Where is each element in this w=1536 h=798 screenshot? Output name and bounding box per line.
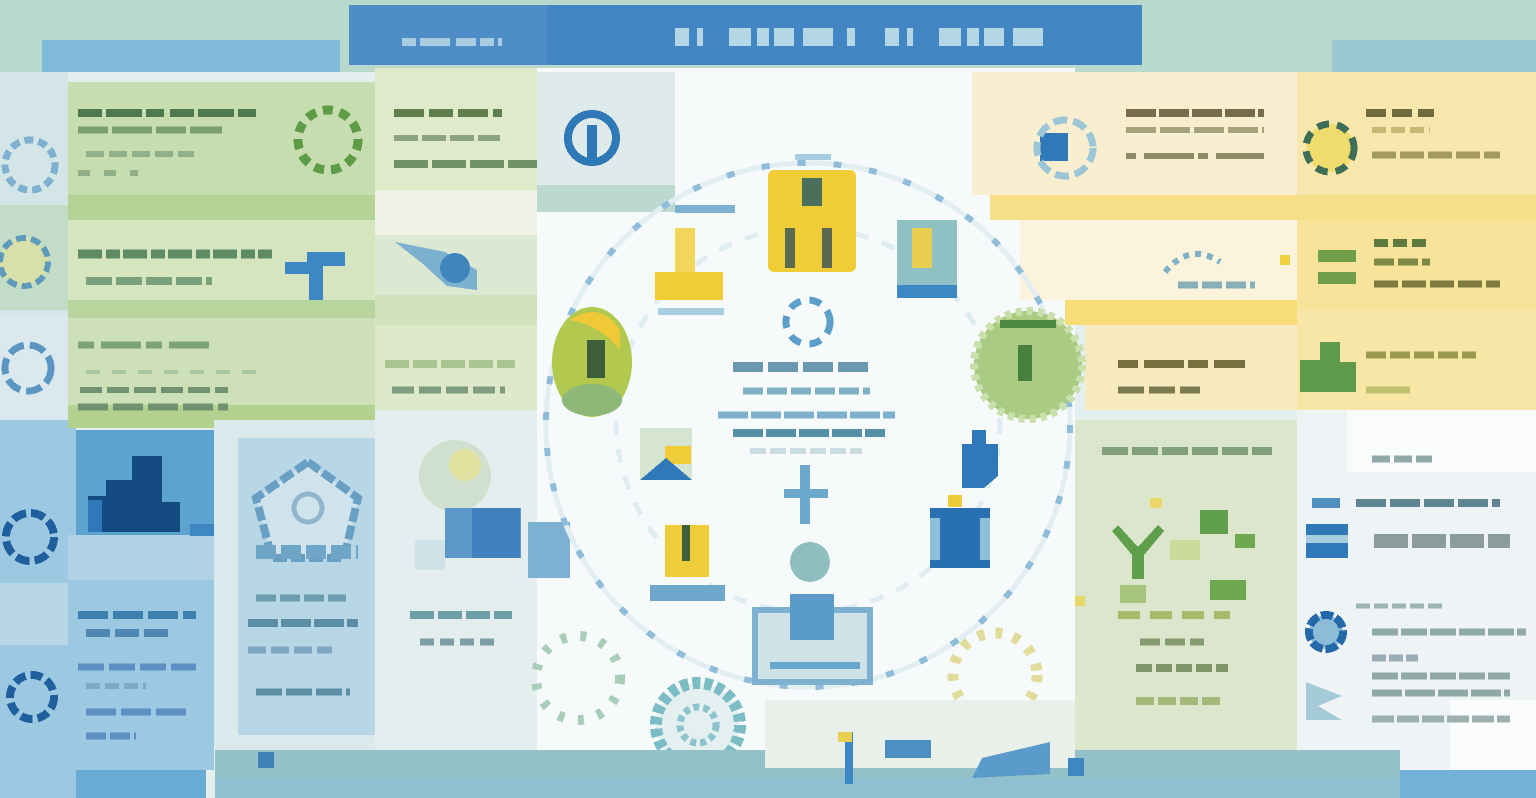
panel: yellow upper <box>972 72 1536 410</box>
panel: blue shield card <box>214 420 375 750</box>
node: small sunrise tile <box>640 428 692 480</box>
top right tab <box>1332 40 1536 72</box>
panel: server illustration <box>375 410 570 750</box>
top left tab <box>42 40 340 72</box>
title banner <box>349 5 1142 65</box>
node: blue shield <box>962 430 998 488</box>
hub icon <box>786 300 830 344</box>
node: lower left yellow <box>650 525 725 601</box>
node: left green circle <box>552 307 632 417</box>
icon: plus <box>784 465 828 524</box>
diagram: central hub <box>546 154 1082 687</box>
node: bottom monitor <box>755 542 870 682</box>
node: right upper tile <box>897 220 957 298</box>
icon: lower right scatter <box>953 596 1085 718</box>
panel: green causes <box>68 82 375 428</box>
panel: green tree card <box>1075 420 1297 750</box>
bottom band <box>215 700 1536 798</box>
node: left upper yellow <box>655 205 735 315</box>
icon: lower gear ring <box>536 636 740 767</box>
hub text <box>718 367 895 451</box>
icon: at-sign tile <box>537 72 675 212</box>
node: right green circle <box>974 311 1082 419</box>
panel: blue skyline <box>68 430 214 798</box>
node: lower right frame <box>930 495 990 568</box>
panel: green secondary column <box>375 68 537 410</box>
panel: left icon strip <box>0 140 68 719</box>
panel: right notes <box>1297 410 1536 770</box>
node: top yellow figure <box>768 154 856 272</box>
